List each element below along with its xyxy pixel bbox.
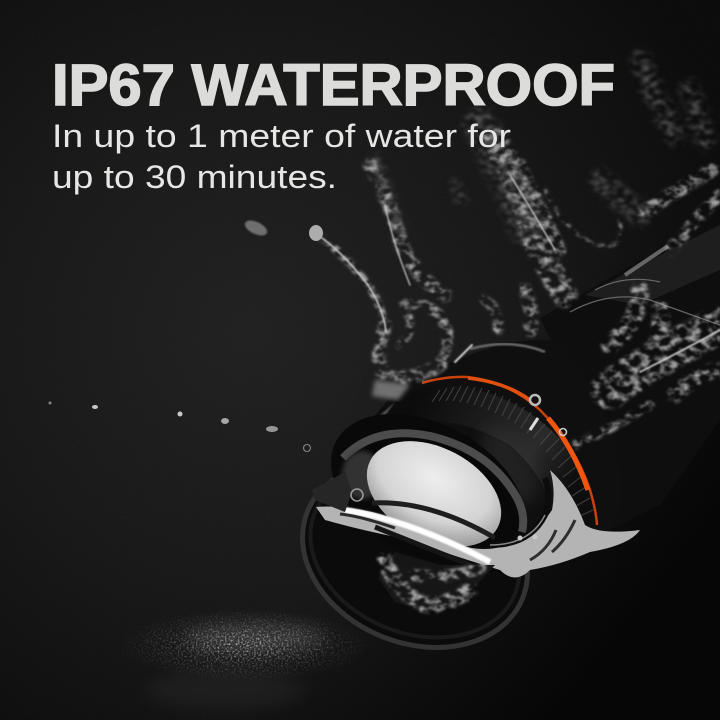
- orange ring: [422, 377, 597, 525]
- flashlight head barrel: [350, 340, 621, 560]
- flashlight handle: [540, 222, 720, 530]
- lens bezel: [305, 383, 551, 597]
- water sheet over lens: [312, 470, 640, 578]
- water splash highlights: [322, 175, 720, 372]
- water splash streams: [322, 140, 720, 445]
- water splash under lens: [378, 552, 495, 612]
- subtitle line 2: up to 30 minutes.: [52, 159, 337, 195]
- water film on left of head: [345, 360, 412, 455]
- puddle ring: [274, 430, 556, 680]
- far background spray: [375, 60, 705, 230]
- light reflection on wet surface: [120, 609, 370, 710]
- water droplets: [48, 217, 566, 541]
- knurled grip ridges: [432, 386, 593, 516]
- lens dome: [349, 420, 519, 568]
- subtitle line 1: In up to 1 meter of water for: [52, 118, 511, 154]
- title: IP67 WATERPROOF: [52, 53, 615, 118]
